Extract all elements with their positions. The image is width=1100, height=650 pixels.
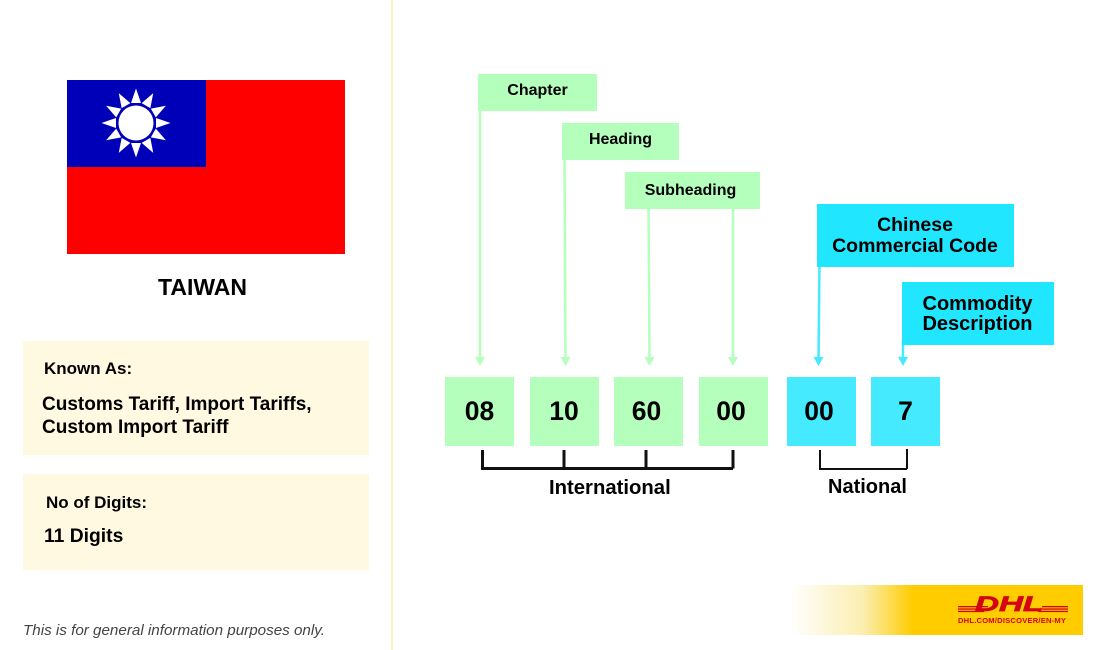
label: no of digits: No of Digits:	[46, 493, 147, 512]
code box: 10: 10	[549, 396, 579, 426]
label: Chinese commercial code: Chinese	[877, 214, 953, 236]
DHL banner	[790, 585, 1083, 635]
label: Chinese commercial code	[817, 204, 1014, 267]
label: commodity description	[902, 282, 1054, 345]
code box: 00 national	[787, 376, 856, 446]
code box: 00	[699, 377, 768, 446]
text: tariff names: Customs Tariff, Import Tariffs,	[42, 394, 312, 415]
panel divider	[391, 0, 393, 650]
bracket: national	[819, 449, 908, 470]
code box: 00 national: 00	[804, 396, 834, 426]
icon: Taiwan flag	[67, 80, 345, 254]
text: digits value: 11 Digits	[44, 526, 123, 547]
label: heading	[562, 123, 679, 160]
label: subheading	[625, 172, 760, 209]
heading: Taiwan: TAIWAN	[158, 274, 247, 300]
logo url: DHL.COM/DISCOVER/EN-MY	[958, 616, 1066, 625]
logo stripes	[958, 606, 1068, 612]
label: commodity description: Description	[922, 312, 1033, 334]
code box: 10	[530, 377, 599, 446]
label: known as: Known As:	[44, 359, 132, 378]
panel: number of digits	[23, 474, 369, 570]
bracket: international	[481, 450, 734, 470]
text: tariff names: Custom Import Tariff	[42, 417, 228, 438]
text: tariff names	[42, 394, 312, 438]
label: chapter: Chapter	[507, 82, 568, 99]
code box: 60	[614, 377, 683, 446]
disclaimer: This is for general information purposes only.	[23, 622, 325, 639]
code box: 08: 08	[465, 396, 494, 426]
code box: 7: 7	[898, 396, 913, 426]
code box: 08	[445, 377, 514, 446]
label: chapter	[478, 74, 597, 111]
panel: known as	[23, 341, 369, 455]
label: national: National	[828, 476, 907, 498]
code box: 00: 00	[716, 396, 746, 426]
label: Chinese commercial code: Commercial Code	[832, 234, 998, 256]
label: heading: Heading	[589, 131, 652, 148]
label: subheading: Subheading	[645, 182, 736, 198]
code box: 7	[871, 376, 940, 446]
label: international: International	[549, 477, 671, 499]
logo: DHL: DHL	[975, 593, 1043, 616]
code box: 60: 60	[632, 396, 661, 426]
label: commodity description: Commodity	[922, 292, 1032, 314]
